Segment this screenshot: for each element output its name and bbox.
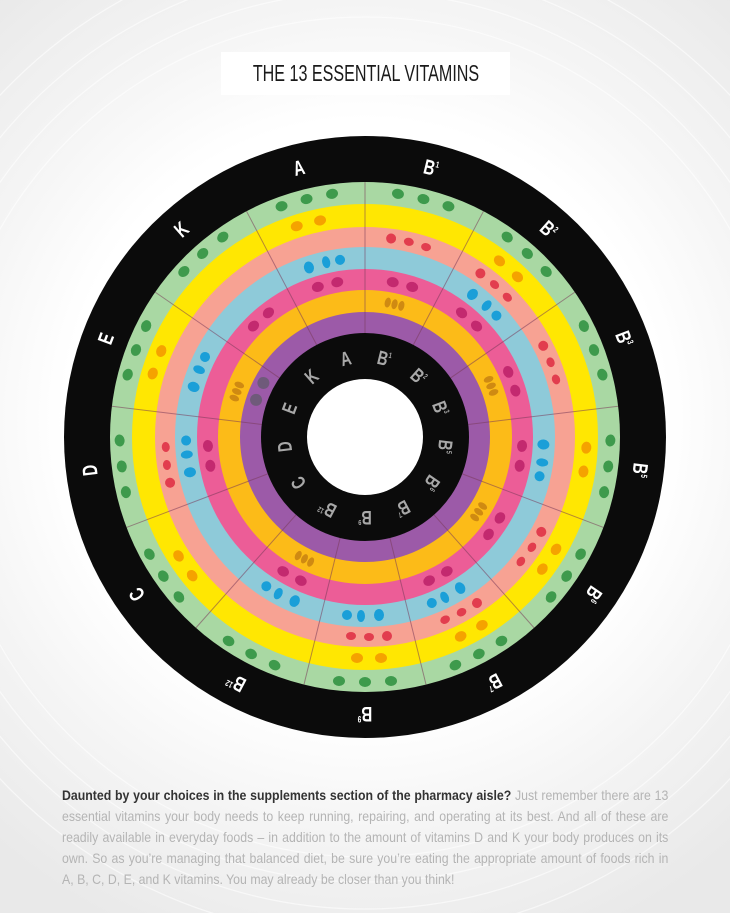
outer vitamin labels: D [77,463,102,477]
outer vitamin labels: C [124,583,150,606]
food icons: pink ring [202,276,528,588]
description paragraph: Daunted by your choices in the supplements section of the pharmacy aisle? Just remember there are 13 essential vitamins your body needs to keep running, repairing, and operating at its best. And all of these are readily available in everyday foods – in addition to the amount of vitamins D and K your body produces on its own. So as you’re managing that balanced diet, be sure you’re eating the appropriate amount of foods rich in A, B, C, D, E, and K vitamins. You may already be closer than you think! [62,787,668,887]
inner vitamin labels: B [428,398,453,416]
inner vitamin labels: K [300,364,323,388]
outer vitamin labels: B [581,582,607,604]
ring: pink [197,269,533,605]
food icons: yellow ring [146,214,592,663]
food icons: salmon ring [160,232,562,641]
inner vitamin labels: B [375,346,391,370]
outer vitamin labels: B [421,154,438,180]
ring: light blue [175,247,555,627]
ring: green [110,182,620,692]
inner vitamin labels: B [361,506,372,529]
outer vitamin labels: 1 [435,159,441,170]
inner vitamin labels: B [406,363,429,387]
title [221,52,510,95]
inner vitamin labels: 1 [388,352,393,360]
outer vitamin labels: B [229,671,250,697]
outer vitamin labels: E [93,329,119,347]
ring: yellow [132,204,598,670]
title: THE 13 ESSENTIAL VITAMINS [252,60,479,86]
inner black ring [261,333,469,541]
outer vitamin labels: K [169,216,194,242]
ring: purple [240,312,490,562]
outer vitamin labels: 12 [224,678,235,690]
outer black ring [64,136,666,738]
white center [307,379,423,495]
inner vitamin labels: B [320,497,340,523]
outer vitamin labels [77,154,653,726]
food icons: blue ring [179,252,551,622]
food icons: orange ring [229,297,499,568]
inner vitamin labels: 12 [316,504,326,514]
outer vitamin labels: 7 [487,684,495,694]
inner vitamin labels: B [433,439,457,452]
inner vitamin labels: E [277,400,302,417]
outer vitamin labels: 2 [551,225,560,235]
food icons: green ring [113,187,617,687]
inner vitamin labels [273,346,457,529]
inner vitamin labels: 9 [358,518,361,526]
inner vitamin labels: C [286,472,311,494]
outer vitamin labels: 6 [588,597,599,606]
outer vitamin labels: 5 [639,474,649,479]
inner vitamin labels: 7 [396,510,403,519]
outer vitamin labels: A [291,155,307,181]
inner vitamin labels: D [273,440,297,453]
outer vitamin labels: B [611,327,637,346]
food icons: purple ring [248,375,272,408]
inner vitamin labels: 3 [442,409,450,415]
inner vitamin labels: B [420,471,445,492]
outer vitamin labels: B [535,215,560,241]
inner vitamin labels: 5 [444,450,452,455]
outer vitamin labels: 3 [625,339,636,346]
inner vitamin labels: 2 [421,373,429,381]
outer vitamin labels: 9 [358,714,361,724]
inner vitamin labels: A [338,346,354,371]
sector spokes [112,182,618,685]
outer vitamin labels: B [628,462,653,475]
inner vitamin labels: B [394,495,414,520]
outer vitamin labels: B [361,702,372,726]
inner vitamin labels: 6 [427,486,436,493]
ring: salmon [155,227,575,647]
outer vitamin labels: B [485,669,506,695]
ring: orange [218,290,512,584]
